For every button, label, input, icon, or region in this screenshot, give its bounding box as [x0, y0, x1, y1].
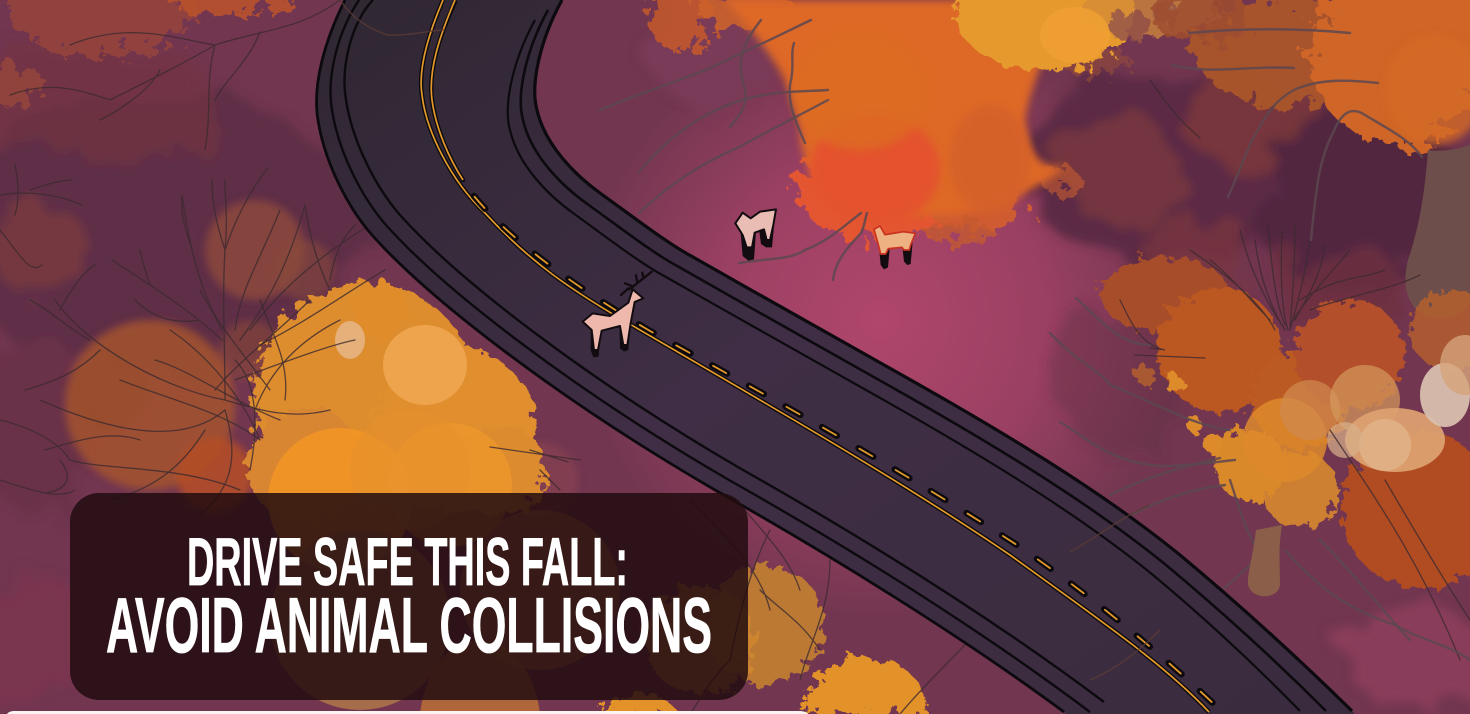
centre line: dashed	[474, 196, 1218, 708]
deer: doe under orange tree	[874, 226, 915, 269]
title line 1: DRIVE SAFE THIS FALL:	[187, 524, 628, 600]
stag legs shadow	[591, 322, 631, 357]
tree canopy: top centre orange tree	[648, 0, 1220, 244]
branches over road	[340, 0, 1160, 680]
road surface	[317, 0, 1355, 714]
doe legs shadow	[741, 227, 774, 261]
deer: doe on the grass	[735, 209, 776, 261]
tree canopy: right orange tree	[1100, 257, 1470, 588]
tree canopy: top left	[0, 0, 285, 105]
doe body	[735, 209, 776, 247]
road edge lines	[317, 0, 1352, 712]
fawn body	[874, 226, 915, 254]
deer: stag on the road	[583, 272, 652, 357]
tree canopy: left rust foliage	[65, 200, 578, 518]
tree trunk: lower right	[1248, 525, 1282, 596]
stag antlers	[621, 272, 652, 295]
centre line: solid yellow	[421, 0, 1209, 712]
road	[317, 0, 1355, 714]
next panel top edge	[6, 711, 808, 714]
title panel	[70, 493, 748, 700]
title line 2: AVOID ANIMAL COLLISIONS	[106, 581, 712, 669]
stag body	[583, 289, 643, 350]
panel background	[70, 493, 748, 700]
tree trunk: right	[1405, 145, 1470, 318]
thick grey limbs	[600, 20, 1470, 660]
fawn legs shadow	[879, 242, 913, 269]
tree canopy: bottom orange trees	[270, 510, 927, 714]
tree canopy: left orange tree	[247, 282, 545, 572]
tree canopy: top right	[1150, 0, 1470, 145]
